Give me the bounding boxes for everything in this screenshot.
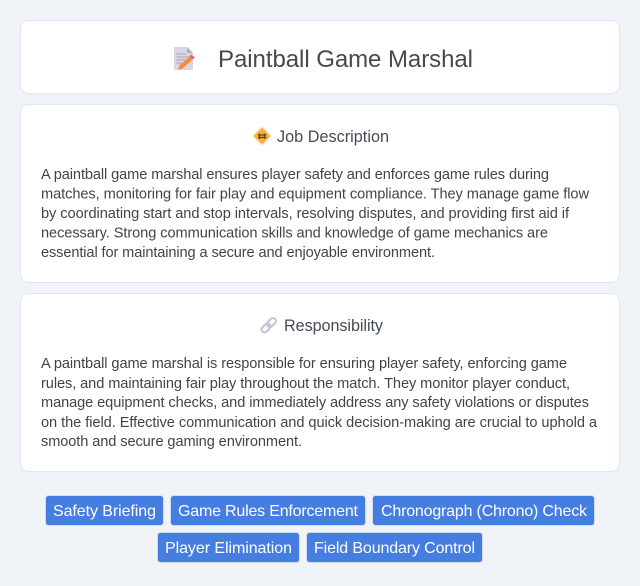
text block: job description: essential for maintaining a secure and enjoyable environment.	[41, 245, 435, 261]
text block: responsibility: on the field. Effective communication and quick decision-making are crucial to uphold a	[41, 415, 598, 431]
panel: title card	[20, 20, 620, 94]
text block: job description: matches, monitoring for fair play and equipment compliance. They manage game flow	[41, 186, 589, 202]
text block: job description: A paintball game marshal ensures player safety and enforces game rules during	[41, 167, 549, 183]
text block: job description: necessary. Strong communication skills and knowledge of game mechanics are	[41, 226, 548, 242]
tag: game rules enforcement: Game Rules Enforcement	[178, 503, 359, 520]
panel: job description	[20, 104, 620, 282]
heading: responsibility: Responsibility	[284, 317, 384, 335]
tag: game rules enforcement	[170, 496, 366, 526]
tag: field boundary control	[306, 532, 482, 562]
tag: player elimination: Player Elimination	[165, 540, 292, 557]
tag: player elimination	[158, 532, 300, 562]
tag: field boundary control: Field Boundary Control	[314, 540, 475, 557]
text block: job description	[41, 167, 589, 261]
text block: responsibility: A paintball game marshal is responsible for ensuring player safety, enforcing game	[41, 356, 567, 372]
text block: responsibility: smooth and secure gaming environment.	[41, 434, 302, 450]
tag: safety briefing: Safety Briefing	[53, 503, 156, 520]
panel: responsibility	[20, 294, 620, 472]
text block: responsibility: rules, and maintaining fair play throughout the match. They monitor player conduct,	[41, 376, 570, 392]
tag: chronograph check: Chronograph (Chrono) Check	[381, 503, 588, 520]
text block: responsibility: manage equipment checks, and immediately address any safety violations or disputes	[41, 395, 589, 411]
heading: job description: Job Description	[277, 128, 389, 146]
text block: job description: by coordinating start and stop intervals, resolving disputes, and providing first aid if	[41, 206, 570, 222]
tags	[46, 496, 594, 562]
title: Paintball Game Marshal	[218, 46, 473, 73]
icon: diamond sign	[254, 128, 270, 144]
text block: responsibility	[41, 356, 598, 450]
icon: document with pencil	[174, 47, 195, 70]
tag: safety briefing	[46, 496, 164, 526]
icon: chain link	[260, 317, 277, 334]
tag: chronograph check	[372, 496, 594, 526]
